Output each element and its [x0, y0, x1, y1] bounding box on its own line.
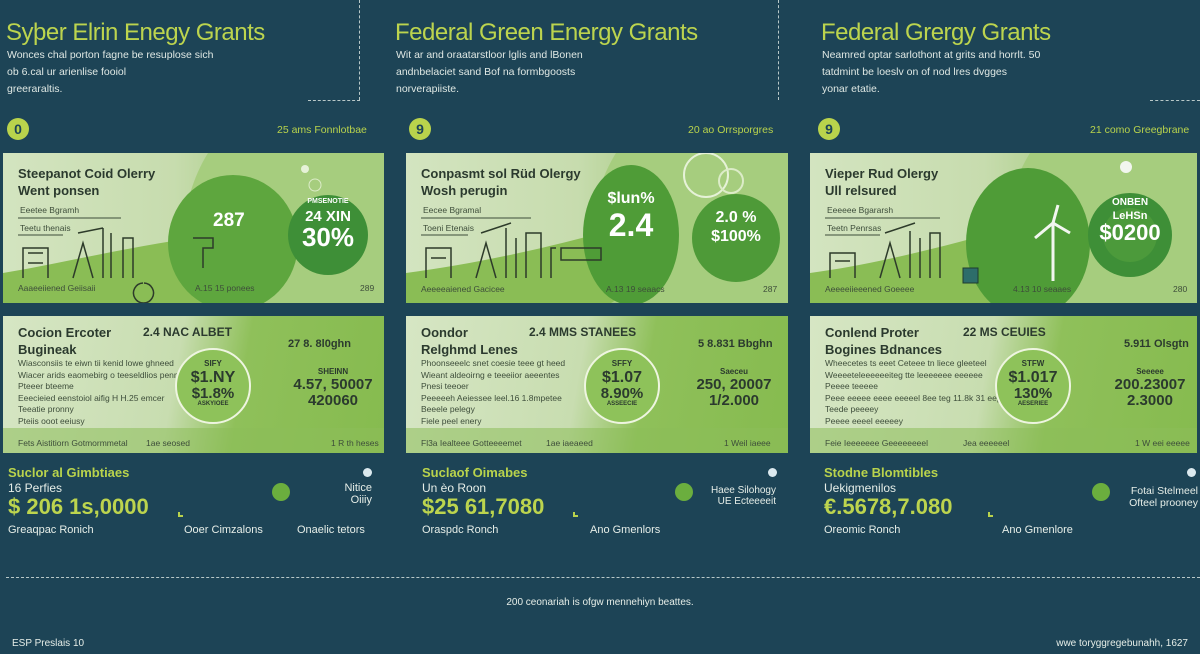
summary block 2: [422, 465, 777, 536]
panel: bottom card 3: 5.911 Olsgtn: [1124, 338, 1189, 350]
ring stat: ASKYIOEE: [197, 401, 228, 407]
number badge 2: 9: [416, 121, 424, 137]
panel: bottom card 2: [406, 316, 788, 453]
summary block 3: Ano Gmenlore: [1002, 524, 1073, 536]
summary block 1: Suclor al Gimbtiaes: [8, 465, 129, 480]
panel: bottom card 3: STFW: [1022, 359, 1044, 368]
panel: bottom card 2: SFFY: [612, 359, 632, 368]
panel: bottom card 1: [3, 316, 384, 453]
panel: bottom card 3: AESERIEE: [1018, 401, 1048, 407]
panel: bottom card 2: Fl3a Iealteee Gotteeeemet: [421, 438, 522, 448]
panel: bottom card 2: 1/2.000: [709, 392, 759, 409]
description 3: Neamred optar sarlothont at grits and horrlt. 50: [822, 49, 1040, 61]
stat: 2.4: 2.4: [609, 207, 653, 243]
summary block 3: [824, 465, 1198, 536]
summary block 1: Greaqpac Ronich: [8, 524, 94, 536]
summary block 3: Ofteel prooney: [1129, 497, 1198, 509]
summary block 2: Oraspdc Ronch: [422, 524, 498, 536]
panel: bottom card 2: 1ae iaeaeed: [546, 438, 593, 448]
panel: bottom card 3: Conlend Proter: [825, 325, 919, 340]
footer left: ESP Preslais 10: [12, 638, 84, 649]
column 3: [810, 19, 1198, 536]
right figures: SHEINN: [318, 367, 348, 376]
panel: bottom card 3: $1.017: [1009, 369, 1057, 386]
panel: top card 1: A.15 15 ponees: [195, 283, 255, 293]
description 3: [822, 49, 1040, 95]
summary block 3: Stodne Blomtibles: [824, 465, 938, 480]
stat circle: 2.0 %: [716, 209, 756, 226]
summary block 1: $ 206 1s,0000: [8, 494, 149, 519]
panel: bottom card 3: Peeee eeeel eeeeey: [825, 416, 903, 426]
panel: bottom card 3: 200.23007: [1115, 376, 1185, 393]
panel: bottom card 2: 5 8.831 Bbghn: [698, 338, 773, 350]
panel: bottom card 2: $1.07: [602, 369, 642, 386]
panel: bottom card 3: Bogines Bdnances: [825, 342, 942, 357]
panel: bottom card 3: Teede peeeey: [825, 404, 878, 414]
panel: bottom card 2: Wieant aldeoirng e teeeiior aeeentes: [421, 370, 559, 380]
panel: bottom card 3: Seeeee: [1136, 367, 1164, 376]
description 1: Wonces chal porton fagne be resuplose sich: [7, 49, 213, 61]
panel: bottom card 3: 22 MS CEUIES: [963, 325, 1046, 339]
panel: bottom card 2: Pnesi teeoer: [421, 381, 469, 391]
summary block 1: Nitice: [344, 482, 372, 494]
description 3: tatdmint be loeslv on of nod lres dvgges: [822, 66, 1007, 78]
stat circle: $100%: [711, 228, 761, 245]
panel: bottom card 1: 2.4 NAC ALBET: [143, 325, 232, 339]
panel: bottom card 2: ASSEECIE: [607, 401, 637, 407]
panel: bottom card 2: Beeele pelegy: [421, 404, 475, 414]
summary block 3: Oreomic Ronch: [824, 524, 900, 536]
card title: [18, 166, 156, 198]
right figures: 420060: [308, 392, 358, 409]
panel: top card 2: 287: [763, 284, 777, 294]
summary block 2: Un èo Roon: [422, 481, 486, 495]
panel: top card 2: Conpasmt sol Rüd Olergy: [421, 166, 581, 181]
right figures: 4.57, 50007: [293, 376, 373, 393]
panel: top card 3: 4.13 10 seaaes: [1013, 284, 1071, 294]
summary block 1: Oiiiy: [351, 494, 372, 506]
panel: top card 3: Aeeeeiieeened Goeeee: [825, 284, 914, 294]
description 1: ob 6.cal ur arienlise fooiol: [7, 66, 126, 78]
panel: top card 1: Aaaeeiiened Geiisaii: [18, 283, 96, 293]
description 1: greeraraltis.: [7, 83, 62, 95]
summary block 2: UE Ecteeeeit: [718, 496, 776, 507]
stat: 2.4: $lun%: [607, 190, 655, 207]
panel: top card 2: A.13 19 seaacs: [606, 284, 665, 294]
stat circle: 30%: 24 XIN: [305, 208, 351, 225]
panel: bottom card 2: Peeeeeh Aeiessee leel.16 1.8mpetee: [421, 392, 562, 402]
title 3: Federal Grergy Grants: [821, 19, 1051, 46]
panel: bottom card 1: 1ae seosed: [146, 438, 190, 448]
panel: top card 2: Aeeeeaiened Gacicee: [421, 284, 505, 294]
description 2: andnbelaciet sand Bof na formbgoosts: [396, 66, 575, 78]
panel: bottom card 2: Phoonseeelc snet coesie teee gt heed: [421, 358, 565, 368]
list: Wiacer arids eaomebirg o teeseldlios pennd: [18, 370, 183, 380]
stat: 2.4: [607, 190, 655, 243]
summary block 1: 16 Perfies: [8, 481, 62, 495]
stat circle: $0200: $0200: [1099, 220, 1161, 245]
summary block 3: Uekigmenilos: [824, 481, 896, 495]
panel: bottom card 2: Fiele peel enery: [421, 416, 481, 426]
panel: bottom card 3: Feie Ieeeeeee Geeeeeeeel: [825, 438, 928, 448]
column 2: [395, 19, 788, 536]
panel: bottom card 1: 27 8. 8l0ghn: [288, 338, 351, 350]
panel: top card 1: 289: [360, 283, 374, 293]
description 2: norverapiiste.: [396, 83, 459, 95]
panel: bottom card 3: Jea eeeeeel: [963, 438, 1009, 448]
list: Eeecieied eenstoiol aifig H H.25 emcer: [18, 392, 164, 402]
card title: Steepanot Coid Olerry: [18, 166, 155, 181]
panel: bottom card 3: [810, 316, 1197, 453]
panel: bottom card 1: Fets Aistitiorn Gotmormmetal: [18, 438, 128, 448]
stat circle: $0200: [1099, 197, 1161, 245]
summary block 3: €.5678,7.080: [824, 494, 952, 519]
panel: bottom card 2: Relghmd Lenes: [421, 342, 518, 357]
stat circle: $0200: ONBEN: [1112, 197, 1148, 208]
panel: bottom card 1: 1 R th heses: [331, 438, 379, 448]
panel: top card 1: [3, 153, 384, 303]
panel: bottom card 3: 1 W eei eeeee: [1135, 438, 1190, 448]
summary block 1: [8, 465, 372, 536]
panel: bottom card 3: Peee eeeee eeee eeeeel 8ee teg 11.8k 31 eepetee: [825, 392, 1018, 402]
list: Pteeer bteeme: [18, 381, 74, 391]
summary block 2: Ano Gmenlors: [590, 524, 660, 536]
panel: bottom card 1: Cocion Ercoter: [18, 325, 111, 340]
list: Wiasconsiis te eiwn tii kenid lowe ghneed: [18, 358, 174, 368]
stat circle: [711, 209, 761, 245]
panel: top card 3: Ull relsured: [825, 183, 897, 198]
right label 3: 21 como Greegbrane: [1090, 124, 1189, 136]
ring stat: [175, 348, 251, 424]
panel: top card 1: Teetu thenais: [20, 223, 71, 233]
number badge 1: [7, 118, 29, 140]
panel: bottom card 3: Wheecetes ts eeet Ceteee tn liece gleeteel: [825, 358, 987, 368]
summary block 2: Suclaof Oimabes: [422, 465, 527, 480]
footer center note: 200 ceonariah is ofgw mennehiyn beattes.: [506, 597, 694, 608]
number badge 3: 9: [825, 121, 833, 137]
panel: bottom card 3: Weeeeteleeeeeeiteg tte leeeeeee eeeeee: [825, 370, 983, 380]
stat: 287: 287: [213, 210, 245, 231]
description 1: [7, 49, 213, 95]
stat circle: 30%: 30%: [302, 222, 354, 252]
panel: bottom card 2: Saeceu: [720, 367, 748, 376]
panel: bottom card 3: 130%: [1014, 385, 1052, 402]
panel: top card 3: 280: [1173, 284, 1187, 294]
stat circle: 30%: PMSENOTIE: [307, 198, 349, 205]
panel: top card 1: Eeetee Bgramh: [20, 205, 79, 215]
panel: top card 2: Toeni Etenais: [423, 223, 474, 233]
number badge 2: [409, 118, 431, 140]
panel: bottom card 2: 250, 20007: [696, 376, 772, 393]
title 2: Federal Green Energy Grants: [395, 19, 698, 46]
panel: bottom card 2: 1 Weil iaeee: [724, 438, 771, 448]
ring stat: $1.8%: [192, 385, 234, 402]
summary block 2: Haee Silohogy: [711, 485, 776, 496]
panel: bottom card 2: 2.4 MMS STANEES: [529, 325, 636, 339]
column 1: [3, 19, 384, 536]
description 2: Wit ar and oraatarstloor lglis and lBonen: [396, 49, 583, 61]
list: Teeatie pronny: [18, 404, 74, 414]
stat circle: $0200: LeHSn: [1113, 210, 1147, 222]
ring stat: $1.NY: [191, 369, 235, 386]
panel: top card 2: [406, 153, 788, 303]
description 3: yonar etatie.: [822, 83, 880, 95]
panel: bottom card 3: Peeee teeeee: [825, 381, 878, 391]
summary block 2: $25 61,7080: [422, 494, 544, 519]
right label 1: 25 ams Fonnlotbae: [277, 124, 367, 136]
number badge 3: [818, 118, 840, 140]
panel: bottom card 2: Oondor: [421, 325, 468, 340]
panel: top card 2: Wosh perugin: [421, 183, 507, 198]
right label 2: 20 ao Orrsporgres: [688, 124, 773, 136]
panel: bottom card 2: 8.90%: [601, 385, 643, 402]
stat circle: 30%: [302, 198, 354, 252]
panel: top card 3: Teetn Penrsas: [827, 223, 881, 233]
number badge 1: 0: [14, 121, 22, 137]
panel: bottom card 1: Bugineak: [18, 342, 77, 357]
summary block 1: Ooer Cimzalons: [184, 524, 263, 536]
panel: top card 3: Eeeeee Bgararsh: [827, 205, 893, 215]
panel: top card 3: [810, 153, 1197, 303]
list: [18, 358, 183, 426]
ring stat: SIFY: [204, 359, 222, 368]
summary block 1: Onaelic tetors: [297, 524, 365, 536]
title 1: Syþer Elrin Enegy Grants: [6, 19, 265, 46]
panel: top card 2: Eecee Bgramal: [423, 205, 481, 215]
panel: bottom card 3: 2.3000: [1127, 392, 1173, 409]
card title: Went ponsen: [18, 183, 99, 198]
right figures: [293, 367, 373, 409]
summary block 3: Fotai Stelmeel: [1131, 485, 1198, 497]
panel: top card 3: Vieper Rud Olergy: [825, 166, 938, 181]
footer right: wwe toryggregebunahh, 1627: [1056, 638, 1188, 649]
description 2: [396, 49, 583, 95]
list: Pteiis ooot eeiusy: [18, 416, 85, 426]
